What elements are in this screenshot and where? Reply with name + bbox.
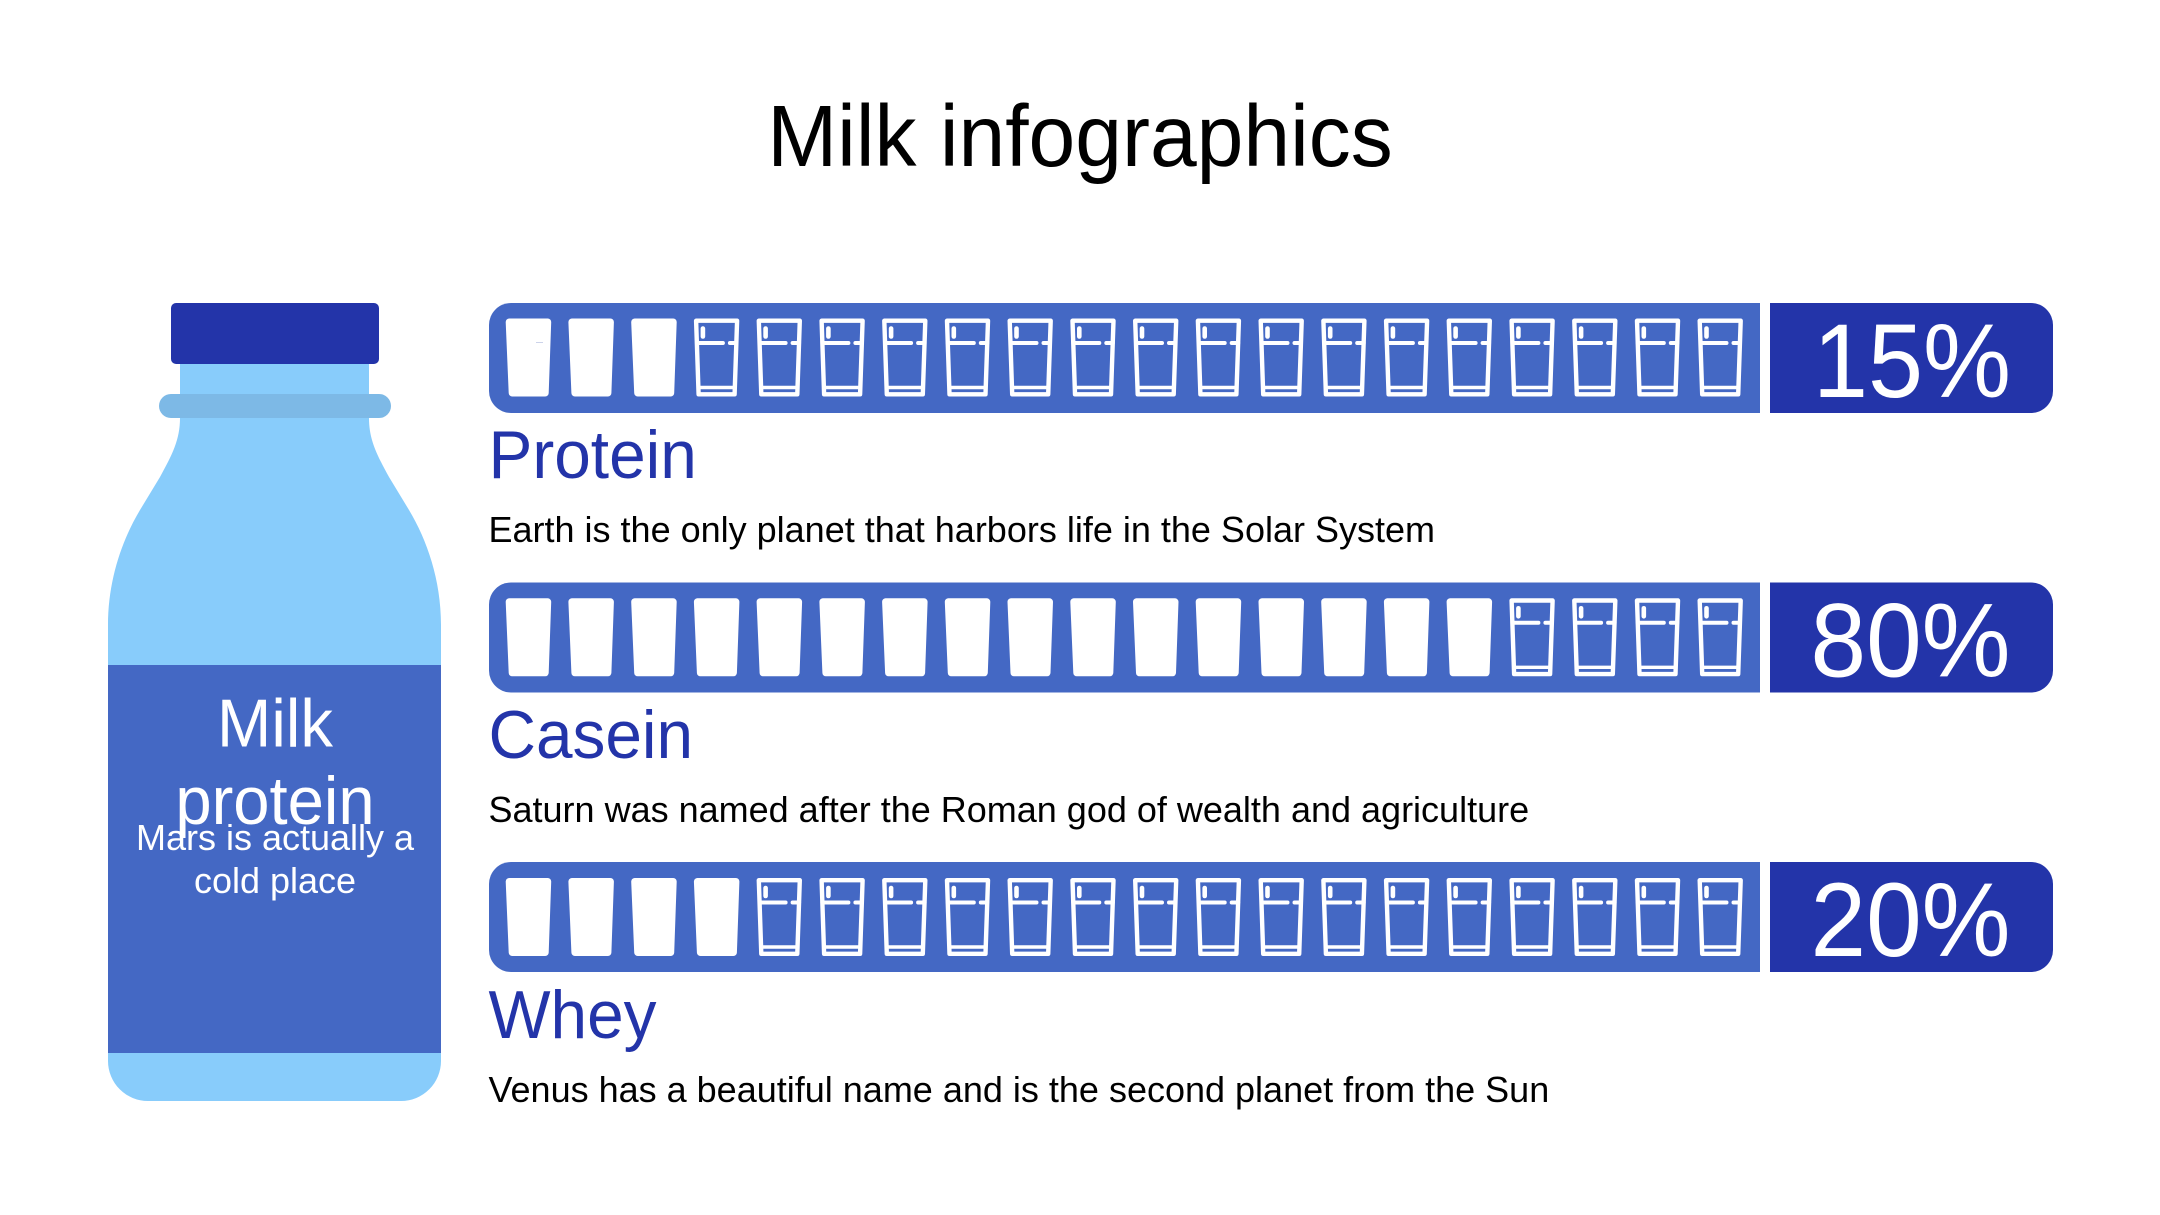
whey bar background	[489, 862, 1760, 972]
row: whey	[488, 862, 2053, 1110]
bottle heading: Milk	[217, 686, 333, 762]
bottle ring	[159, 394, 391, 418]
bottle cap	[171, 303, 379, 364]
casein heading: Casein	[488, 698, 693, 773]
casein bar background	[489, 582, 1760, 692]
casein percentage box	[1770, 582, 2053, 692]
casein percentage: 80%	[1810, 582, 2010, 700]
protein percentage: 15%	[1813, 303, 2011, 420]
whey percentage box	[1770, 862, 2053, 972]
protein glasses: 3 of 20 filled	[509, 321, 1741, 394]
casein description: Saturn was named after the Roman god of wealth and agriculture	[488, 789, 1529, 830]
whey heading: Whey	[488, 978, 657, 1053]
bottle body	[108, 360, 441, 1101]
bottle heading: protein	[175, 764, 375, 839]
protein bar background	[489, 303, 1760, 413]
bottle label	[108, 665, 441, 1053]
whey description: Venus has a beautiful name and is the second planet from the Sun	[488, 1069, 1549, 1110]
bottle heading	[175, 686, 375, 839]
bottle description: cold place	[194, 860, 356, 901]
row: casein	[488, 582, 2053, 830]
bottle description: Mars is actually a	[136, 817, 415, 858]
title: Milk infographics	[767, 88, 1393, 185]
protein description: Earth is the only planet that harbors life in the Solar System	[488, 509, 1435, 550]
whey percentage: 20%	[1810, 862, 2010, 979]
casein glasses: 16 of 20 filled	[509, 600, 1741, 674]
row: protein	[488, 303, 2053, 550]
whey glasses: 4 of 20 filled	[509, 880, 1741, 954]
protein heading: Protein	[488, 418, 697, 493]
protein percentage box	[1770, 303, 2053, 413]
bottle	[108, 303, 441, 1101]
